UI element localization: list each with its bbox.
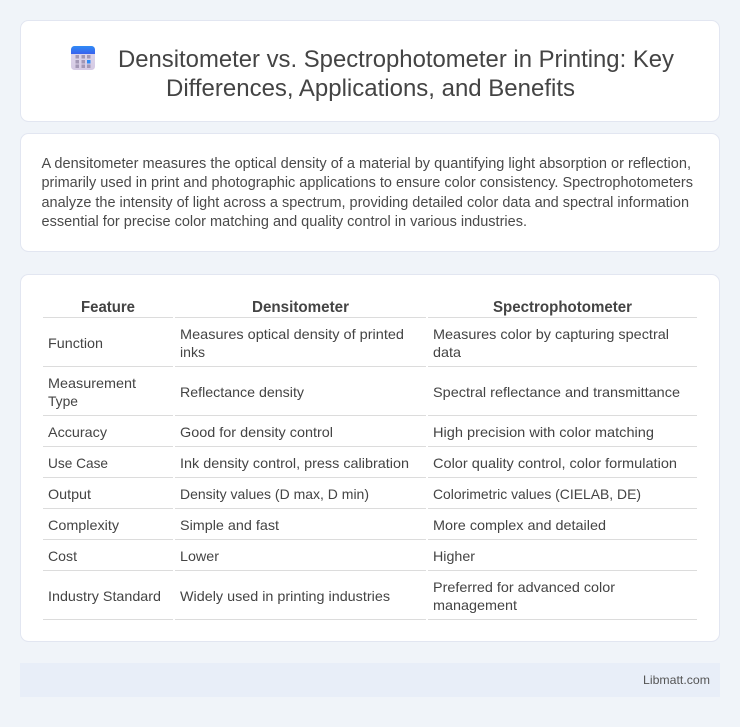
row: measurement type: Measurement (48, 375, 136, 391)
row: industry standard (43, 579, 697, 620)
row: function: inks (180, 344, 205, 360)
row: industry standard: Preferred for advanced color (433, 579, 615, 595)
panel: introduction paragraph (20, 134, 720, 252)
row: use case (43, 455, 697, 478)
row: measurement type: Type (48, 393, 78, 409)
row: function: data (433, 344, 461, 360)
row: use case: Color quality control, color formulation (433, 455, 677, 471)
panel: title card (20, 20, 720, 122)
title (118, 46, 674, 102)
row: cost (43, 548, 697, 570)
row: function: Function (48, 335, 103, 351)
row: use case: Ink density control, press calibration (180, 455, 409, 471)
row: measurement type: Reflectance density (180, 384, 304, 400)
row: complexity: Simple and fast (180, 517, 279, 533)
row: function: Measures color by capturing spectral (433, 326, 669, 342)
icon: calendar grid (71, 46, 95, 70)
row: output (43, 486, 697, 508)
table header row: Spectrophotometer (493, 299, 632, 316)
row: measurement type: Spectral reflectance and transmittance (433, 384, 680, 400)
footer text: source: Libmatt.com (643, 673, 710, 687)
row: industry standard: Widely used in printing industries (180, 588, 390, 604)
row: complexity: More complex and detailed (433, 517, 606, 533)
row: industry standard: management (433, 597, 517, 613)
text block: introduction (42, 156, 693, 230)
row: cost: Cost (48, 548, 77, 564)
title: Densitometer vs. Spectrophotometer in Printing: Key (118, 46, 674, 73)
text block: introduction: essential for precise color matching and quality control in various industries. (42, 214, 527, 230)
row: accuracy: Accuracy (48, 424, 107, 440)
row: complexity: Complexity (48, 517, 119, 533)
table header row: Feature (81, 299, 135, 316)
row: measurement type (43, 375, 697, 416)
row: complexity (43, 517, 697, 540)
row: cost: Higher (433, 548, 475, 564)
row: industry standard: Industry Standard (48, 588, 161, 604)
table header row (43, 299, 697, 318)
text block: introduction: primarily used in print and photographic applications to ensure color consistency. Spectrophotometers (42, 175, 693, 191)
row: cost: Lower (180, 548, 219, 564)
row: accuracy: Good for density control (180, 424, 333, 440)
row: output: Output (48, 486, 91, 502)
footer bar (20, 663, 720, 697)
row: use case: Use Case (48, 455, 108, 471)
text block: introduction: analyze the intensity of light across a spectrum, providing detailed color data and spectral information (42, 195, 689, 211)
table header row: Densitometer (252, 299, 349, 316)
row: output: Density values (D max, D min) (180, 486, 369, 502)
text block: introduction: A densitometer measures the optical density of a material by quantifying light absorption or reflection, (42, 156, 691, 172)
row: accuracy: High precision with color matching (433, 424, 654, 440)
title: Differences, Applications, and Benefits (166, 75, 575, 102)
row: function (43, 326, 697, 366)
row: function: Measures optical density of printed (180, 326, 404, 342)
panel: comparison table (20, 274, 720, 642)
row: output: Colorimetric values (CIELAB, DE) (433, 486, 641, 502)
row: accuracy (43, 424, 697, 446)
